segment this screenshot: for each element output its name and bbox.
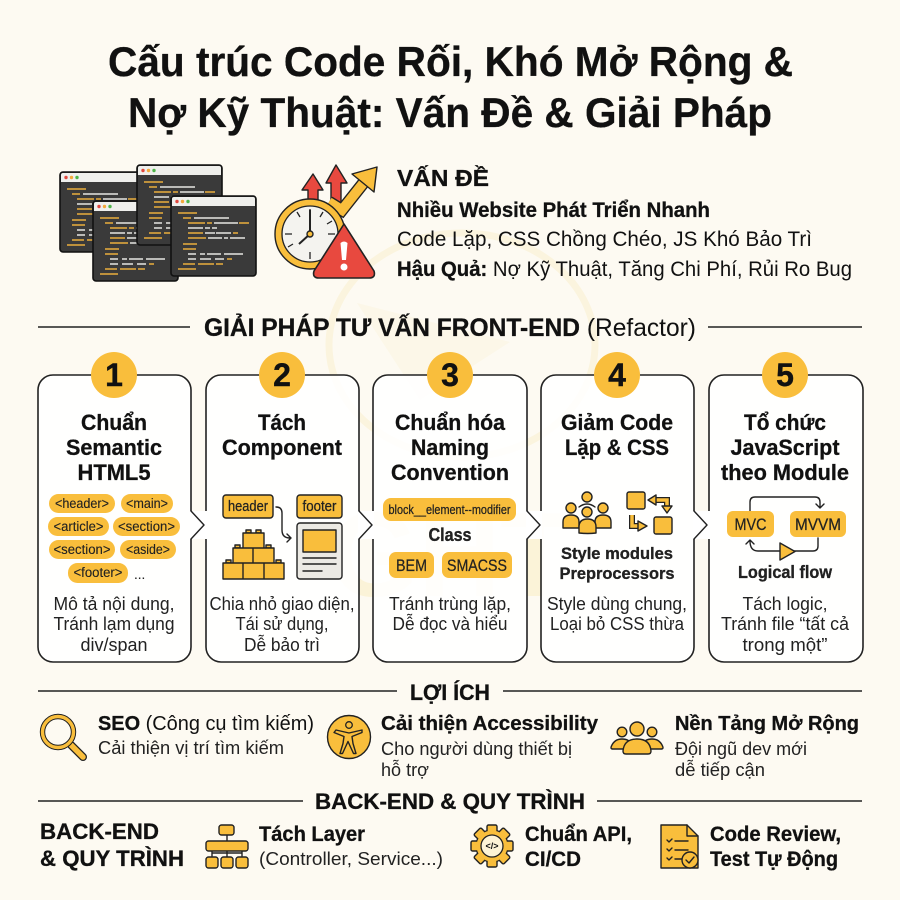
chips: naming methods [389,552,512,578]
chips: semantic tags: ... [134,567,145,582]
item: code review and tests [661,823,841,871]
panel: step 4 reduce duplicate CSS: 4 [608,357,626,393]
icon: clock with rising arrows and warning [275,165,377,278]
description: Loại bỏ CSS thừa [550,613,685,634]
arrows between cards [190,511,710,539]
problem text block [397,164,852,281]
panel: step 3 naming: Naming [411,435,489,460]
icon: overlapping code windows [60,165,256,281]
diagram: MVC MVVM flow [727,497,846,560]
chips: naming methods: BEM [396,556,427,575]
description [547,593,687,634]
label: style modules [560,544,674,583]
description [721,593,850,655]
panel: step 1 semantic HTML5: Semantic [66,435,162,460]
icon: header and footer blocks [223,495,342,579]
description [54,593,174,655]
icon: hierarchy [206,825,248,868]
item: layers: Tách Layer [259,823,365,846]
panel: step 1 semantic HTML5 [38,352,191,662]
icon: gear with code: </> [485,841,499,851]
panel: step 3 naming: 3 [441,357,459,393]
heading: benefits: LỢI ÍCH [410,680,490,705]
panel: step 4 reduce duplicate CSS: Giảm Code [561,410,673,435]
panel: step 2 component: Component [222,435,342,460]
label: back-end and process: BACK-END [40,819,159,844]
panel: step 1 semantic HTML5: Chuẩn [81,410,147,435]
benefit: SEO [42,712,314,758]
label: style modules: Preprocessors [560,564,674,583]
chips: semantic tags: <main> [126,496,168,511]
panel: step 2 component: 2 [273,357,291,393]
description: Style dùng chung, [547,593,687,614]
panel: step 1 semantic HTML5: 1 [105,357,123,393]
title: Cấu trúc Code Rối, Khó Mở Rộng & [108,38,793,85]
chips: semantic tags: <section> [54,542,111,557]
chips: semantic tags: <article> [54,519,104,534]
benefit: accessibility: Cải thiện Accessibility [381,712,599,735]
benefit: scalable foundation: Đội ngũ dev mới [675,738,807,759]
panel: step 3 naming: Convention [391,460,509,485]
problem text block: VẤN ĐỀ [397,164,489,191]
icon: magnifier [42,716,83,757]
description: Dễ bảo trì [244,634,320,655]
heading: back-end and process: BACK-END & QUY TRÌNH [315,789,585,814]
panel: step 5 JavaScript modules [709,352,863,662]
benefit: scalable foundation: dễ tiếp cận [675,759,765,780]
description [210,593,354,655]
item: layers [206,823,443,869]
heading: solutions: GIẢI PHÁP TƯ VẤN FRONT-END (Refactor) [204,312,696,342]
chips: semantic tags: <section> [118,519,175,534]
label: back-end and process: & QUY TRÌNH [40,846,184,871]
item: API and CI/CD: CI/CD [525,848,581,871]
description: Tái sử dụng, [236,613,328,634]
panel: step 4 reduce duplicate CSS: Lặp & CSS [565,435,669,460]
title: Nợ Kỹ Thuật: Vấn Đề & Giải Pháp [128,89,772,136]
panel: step 5 JavaScript modules: JavaScript [730,435,840,460]
item: code review and tests: Test Tự Động [710,848,838,871]
item: layers: (Controller, Service...) [259,848,443,869]
benefit: scalable foundation: Nền Tảng Mở Rộng [675,712,859,735]
item: code review and tests: Code Review, [710,823,841,846]
benefit: accessibility: Cho người dùng thiết bị [381,738,572,759]
description: Tránh file “tất cả [721,613,850,634]
benefit: accessibility [328,712,599,780]
description: Mô tả nội dung, [54,593,174,614]
icon: checklist document [661,825,698,868]
chips: semantic tags: <header> [55,496,109,511]
problem text block: Code Lặp, CSS Chồng Chéo, JS Khó Bảo Trì [397,227,812,251]
icon: refactor arrows [627,492,672,534]
panel: step 4 reduce duplicate CSS [541,352,694,662]
chips: semantic tags [48,494,180,583]
panel: step 5 JavaScript modules: Tổ chức [744,410,826,435]
description: Chia nhỏ giao diện, [210,593,354,614]
diagram: MVC MVVM flow: MVVM [795,515,841,534]
benefit: SEO: SEO (Công cụ tìm kiếm) [98,712,314,735]
description: Dễ đọc và hiểu [392,613,508,634]
icon: group [611,722,663,754]
panel: step 5 JavaScript modules: 5 [776,357,794,393]
chip: BEM syntax: block__element--modifier [388,502,511,517]
label: style modules: Style modules [561,544,673,563]
panel: step 5 JavaScript modules: theo Module [721,460,849,485]
description: Tránh trùng lặp, [389,593,511,614]
panel: step 2 component: Tách [258,410,306,435]
problem text block: Nhiều Website Phát Triển Nhanh [397,198,710,222]
text: GHT [330,488,570,622]
icon: header and footer blocks: footer [302,499,337,515]
icon: accessibility person [328,716,370,758]
panel: step 3 naming: Chuẩn hóa [395,410,505,435]
item: API and CI/CD: Chuẩn API, [525,823,632,846]
chips: semantic tags: <footer> [74,565,123,580]
icon: header and footer blocks: header [228,499,268,515]
panel: step 3 naming [373,352,527,662]
description: trong một” [742,634,828,655]
benefit: SEO: Cải thiện vị trí tìm kiếm [98,737,284,758]
benefit: accessibility: hỗ trợ [381,759,429,780]
label: class: Class [428,525,472,545]
title [108,38,793,136]
icon: team [563,492,611,534]
benefit: scalable foundation [611,712,859,780]
panel: step 1 semantic HTML5: HTML5 [78,460,150,485]
description [389,593,511,634]
panel: step 2 component [206,352,359,662]
description: Tránh lạm dụng [54,613,174,634]
chips: semantic tags: <aside> [126,542,170,557]
description: Tách logic, [742,593,828,614]
chip: BEM syntax [383,498,516,521]
description: div/span [80,634,148,655]
problem text block: Hậu Quả: Nợ Kỹ Thuật, Tăng Chi Phí, Rủi Ro Bug [397,257,852,281]
chips: naming methods: SMACSS [447,556,507,575]
icon: gear with code [471,825,513,867]
item: API and CI/CD [471,823,632,871]
diagram: MVC MVVM flow: MVC [734,515,766,534]
label: logical flow: Logical flow [738,562,832,582]
label: back-end and process [40,819,184,871]
